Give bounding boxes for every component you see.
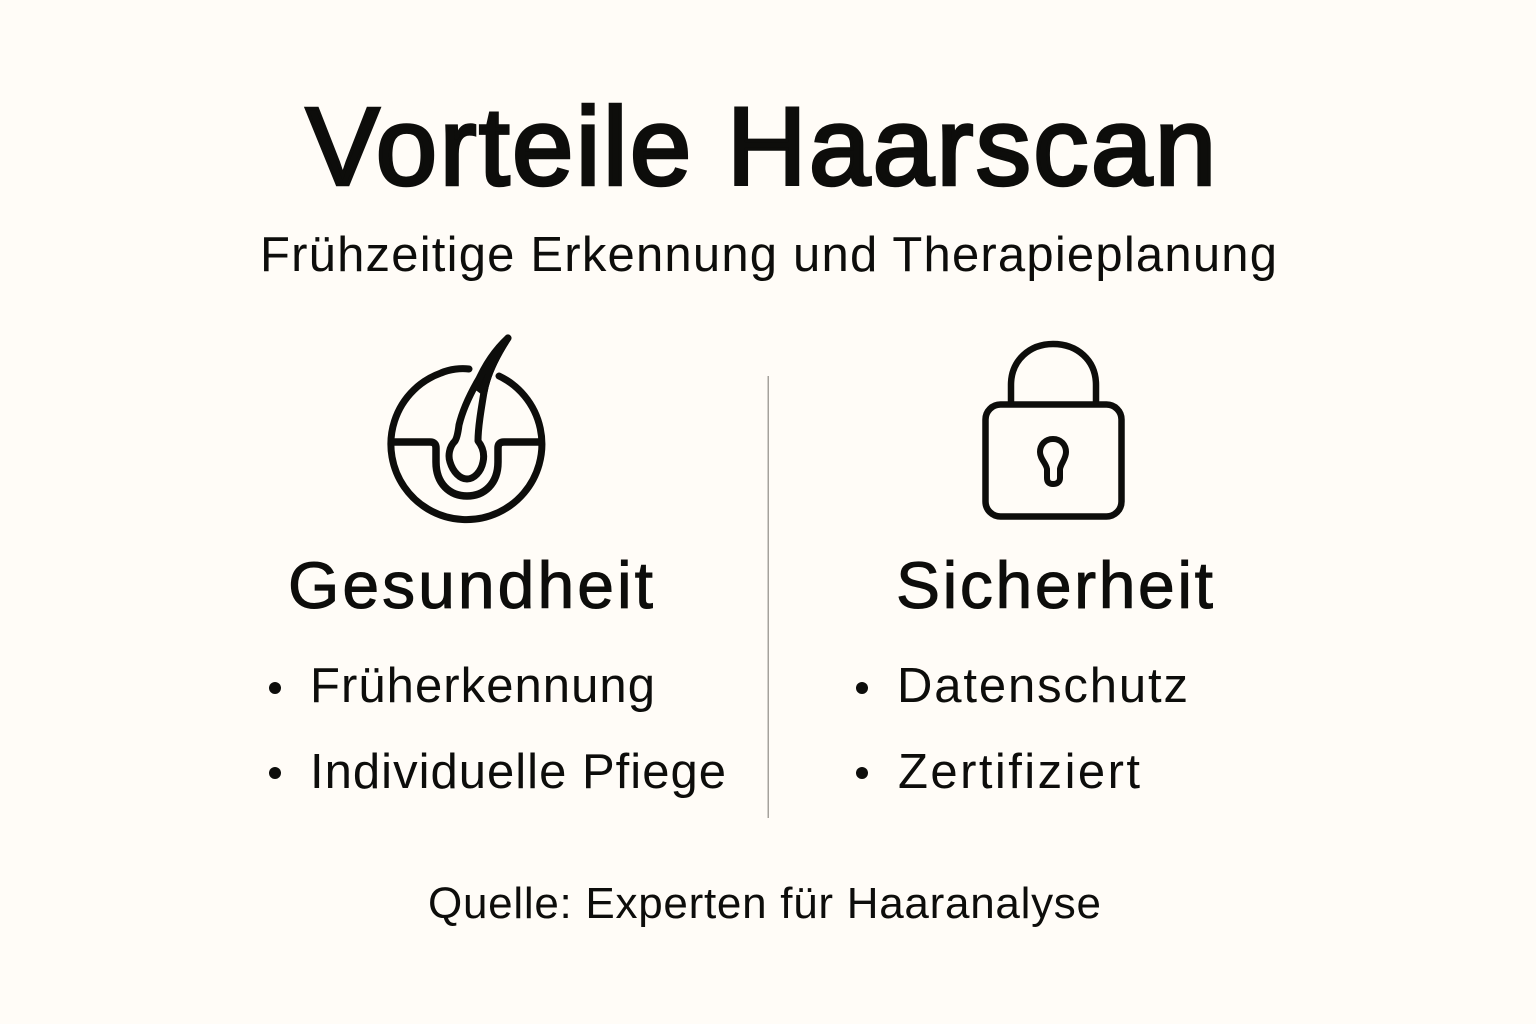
center divider xyxy=(768,376,769,818)
panel: Sicherheit xyxy=(856,548,1213,799)
bullet dot 1 xyxy=(269,682,281,694)
bullet text: Individuelle Pfiege: Individuelle Pfiege xyxy=(310,745,726,799)
bullet dot 1 xyxy=(856,682,868,694)
icon: hair follicle xyxy=(391,338,542,520)
source note: Quelle: Experten für Haaranalyse xyxy=(428,879,1101,928)
heading: Gesundheit: Gesundheit xyxy=(288,548,653,622)
subtitle: Frühzeitige Erkennung und Therapieplanung xyxy=(260,228,1277,282)
bullet text: Zertifiziert: Zertifiziert xyxy=(898,745,1140,799)
icon: padlock xyxy=(986,344,1122,516)
bullet text: Datenschutz: Datenschutz xyxy=(897,659,1188,713)
bullet dot 2 xyxy=(269,767,281,779)
bullet dot 2 xyxy=(856,767,868,779)
heading: Sicherheit: Sicherheit xyxy=(896,548,1213,622)
panel: Gesundheit xyxy=(269,548,726,799)
bullet text: Früherkennung: Früherkennung xyxy=(310,659,655,713)
title: Vorteile Haarscan xyxy=(306,86,1216,208)
